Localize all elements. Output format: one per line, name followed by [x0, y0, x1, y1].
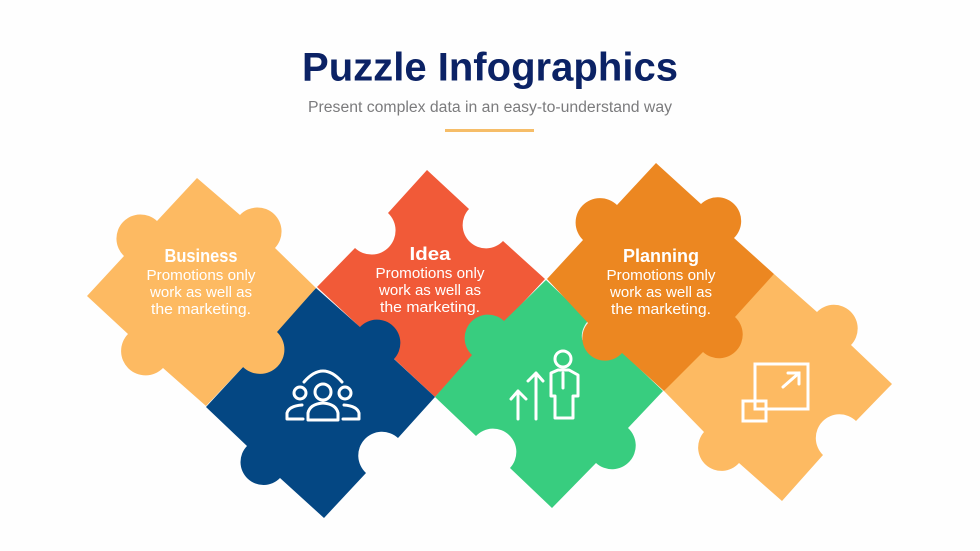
puzzle piece: light orange expand	[664, 274, 892, 501]
text: Idea	[376, 244, 485, 316]
text: Planning	[606, 246, 716, 318]
text: Idea: the marketing.	[380, 300, 480, 316]
puzzle piece: orange Planning	[547, 163, 774, 391]
text: Business: Promotions only	[146, 268, 256, 284]
puzzle piece: navy people	[206, 288, 435, 518]
text: Planning: the marketing.	[611, 302, 711, 318]
icon: person with growth arrows	[511, 351, 578, 419]
puzzle piece: yellow Business	[87, 178, 316, 406]
text: Business: Business	[164, 246, 238, 266]
text: Business	[146, 246, 256, 318]
title: Puzzle Infographics	[302, 46, 678, 90]
icon: people group	[287, 371, 359, 420]
icon: expand squares	[743, 364, 808, 421]
white sliver beside tab	[583, 322, 588, 340]
text: Business: the marketing.	[151, 302, 251, 318]
accent underline	[445, 129, 534, 132]
text: Idea: Idea	[410, 244, 452, 264]
puzzle piece: green growth	[435, 280, 663, 508]
text: Idea: Promotions only	[376, 266, 485, 282]
text: Business: work as well as	[149, 285, 252, 301]
text: Idea: work as well as	[378, 283, 481, 299]
text: Planning: Promotions only	[606, 268, 716, 284]
text: Planning: Planning	[623, 246, 699, 266]
text: Planning: work as well as	[609, 285, 712, 301]
puzzle piece: red Idea	[317, 170, 545, 397]
subtitle: Present complex data in an easy-to-understand way	[308, 99, 672, 116]
